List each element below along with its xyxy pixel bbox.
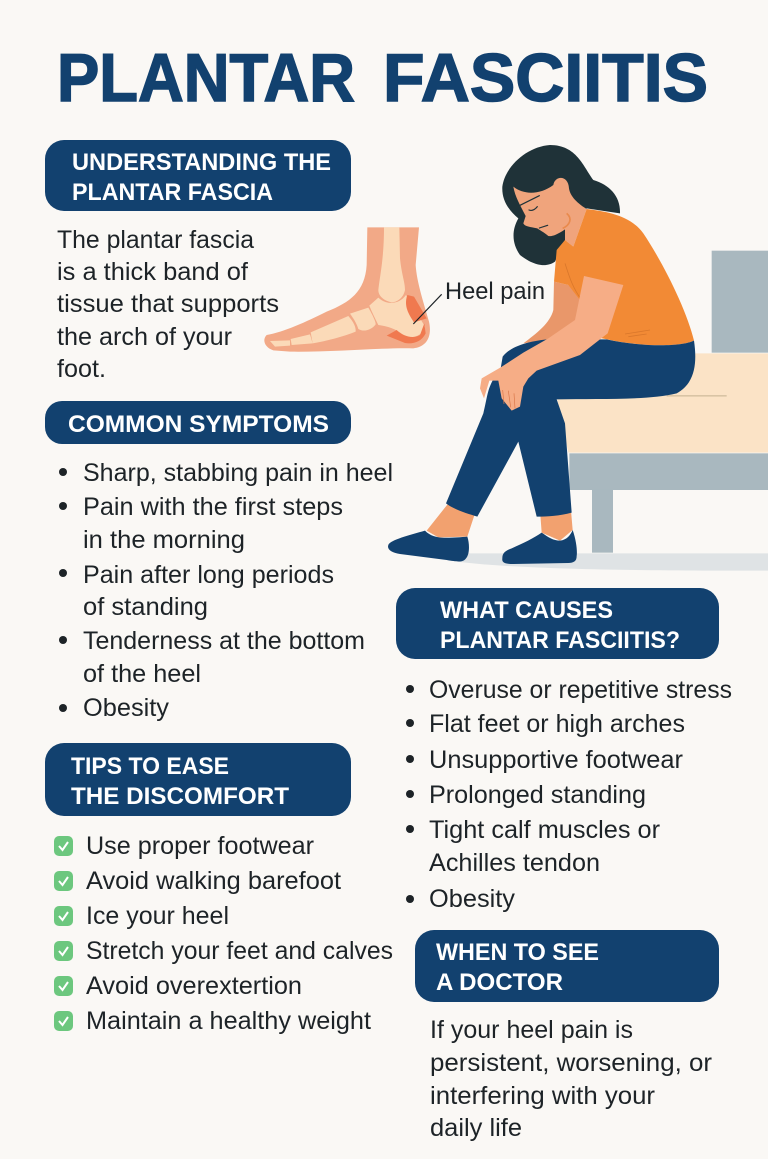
causes list: Tight calf muscles or bbox=[429, 816, 660, 844]
blue trousers bbox=[446, 339, 695, 517]
panel: what causes plantar fasciitis bbox=[396, 588, 732, 913]
label: heel pain: Heel pain bbox=[445, 278, 545, 305]
title: PLANTAR bbox=[57, 40, 355, 116]
panel: common symptoms bbox=[45, 401, 393, 722]
causes list: Unsupportive footwear bbox=[429, 746, 683, 774]
heading: WHEN TO SEE bbox=[436, 939, 599, 966]
causes list: Prolonged standing bbox=[429, 781, 646, 809]
description: tissue that supports bbox=[57, 290, 279, 318]
tips list: Use proper footwear bbox=[86, 832, 314, 860]
shoes bbox=[388, 530, 577, 564]
symptom list: of standing bbox=[83, 593, 208, 621]
causes list: Flat feet or high arches bbox=[429, 710, 685, 738]
heading: UNDERSTANDING THE bbox=[72, 149, 331, 176]
causes list: Obesity bbox=[429, 885, 515, 913]
title: FASCIITIS bbox=[383, 40, 708, 116]
causes list: Achilles tendon bbox=[429, 849, 600, 877]
heading: PLANTAR FASCIITIS? bbox=[440, 627, 680, 654]
tips list bbox=[86, 832, 393, 1035]
front arm and hand bbox=[480, 276, 623, 411]
face and neck bbox=[513, 178, 587, 247]
bed bbox=[557, 251, 768, 553]
inflamed heel bbox=[387, 295, 427, 343]
tips list: Avoid overextertion bbox=[86, 972, 302, 1000]
description: The plantar fascia bbox=[57, 226, 254, 254]
check icons bbox=[54, 836, 73, 1031]
title bbox=[57, 40, 708, 116]
causes list bbox=[406, 676, 732, 913]
symptom list: Pain with the first steps bbox=[83, 493, 343, 521]
advice text: persistent, worsening, or bbox=[430, 1049, 712, 1077]
tips list: Ice your heel bbox=[86, 902, 229, 930]
heading: COMMON SYMPTOMS bbox=[68, 411, 329, 438]
foot outline bbox=[264, 227, 430, 352]
description: the arch of your bbox=[57, 323, 232, 351]
heading bbox=[415, 930, 719, 1002]
tips list: Avoid walking barefoot bbox=[86, 867, 341, 895]
heading: TIPS TO EASE bbox=[71, 753, 229, 780]
heading bbox=[396, 588, 719, 659]
heading: PLANTAR FASCIA bbox=[72, 179, 273, 206]
description: foot. bbox=[57, 355, 106, 383]
symptom list: Obesity bbox=[83, 694, 169, 722]
heading bbox=[45, 743, 351, 816]
symptom list: Pain after long periods bbox=[83, 561, 334, 589]
ankles bbox=[427, 503, 573, 541]
symptom list bbox=[59, 459, 393, 722]
foot anatomy illustration bbox=[264, 227, 442, 352]
heading bbox=[45, 401, 351, 444]
symptom list: Sharp, stabbing pain in heel bbox=[83, 459, 393, 487]
bones bbox=[378, 227, 405, 302]
symptom list: of the heel bbox=[83, 660, 201, 688]
heading bbox=[45, 140, 351, 211]
description: is a thick band of bbox=[57, 258, 248, 286]
advice text: interfering with your bbox=[430, 1082, 655, 1110]
advice text: daily life bbox=[430, 1114, 522, 1142]
panel: when to see a doctor bbox=[415, 930, 719, 1142]
heading: WHAT CAUSES bbox=[440, 597, 613, 624]
symptom list: Tenderness at the bottom bbox=[83, 627, 365, 655]
panel: understanding the plantar fascia bbox=[45, 140, 351, 383]
back arm bbox=[523, 282, 593, 343]
heading: A DOCTOR bbox=[436, 969, 563, 996]
advice text bbox=[430, 1016, 712, 1142]
symptom list: in the morning bbox=[83, 526, 245, 554]
pointer line bbox=[413, 294, 442, 324]
advice text: If your heel pain is bbox=[430, 1016, 633, 1044]
orange shirt bbox=[554, 209, 694, 345]
causes list: Overuse or repetitive stress bbox=[429, 676, 732, 704]
floor shadow bbox=[457, 553, 768, 571]
illustration: woman sitting on bed holding her knee bbox=[388, 145, 768, 571]
tips list: Maintain a healthy weight bbox=[86, 1007, 371, 1035]
description bbox=[57, 226, 279, 383]
panel: tips to ease the discomfort bbox=[45, 743, 393, 1035]
hair bbox=[502, 145, 620, 265]
heading: THE DISCOMFORT bbox=[71, 783, 289, 810]
tips list: Stretch your feet and calves bbox=[86, 937, 393, 965]
